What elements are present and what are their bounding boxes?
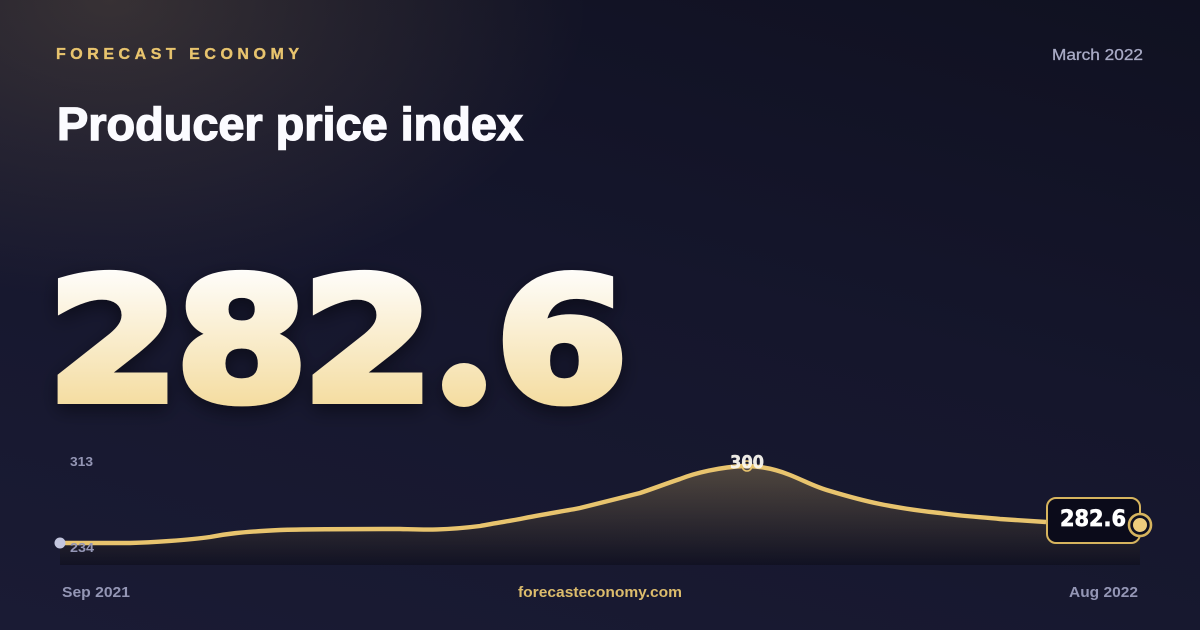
peak value: 300: [730, 452, 764, 473]
headline value: 8: [176, 242, 308, 441]
headline value: 2: [47, 242, 180, 441]
start date: Sep 2021: [62, 585, 130, 601]
area fill: [60, 466, 1140, 565]
start point: [54, 538, 66, 548]
end marker: [1129, 514, 1151, 536]
end callout: 282.6: [1060, 507, 1126, 532]
axis min label: 234: [70, 540, 95, 555]
headline value: 2: [302, 242, 434, 441]
website: forecasteconomy.com: [518, 585, 682, 601]
brand label: FORECAST ECONOMY: [56, 46, 299, 63]
title: Producer price index: [57, 98, 523, 150]
chart: [54, 452, 1151, 565]
axis max label: 313: [70, 454, 93, 469]
trend line: [60, 466, 1046, 543]
headline value: .: [451, 336, 477, 406]
date label: March 2022: [1052, 47, 1143, 64]
end date: Aug 2022: [1069, 585, 1138, 601]
headline value: 6: [495, 242, 628, 441]
headline value: [47, 242, 628, 441]
peak marker: [742, 461, 752, 471]
end callout: [1047, 498, 1140, 543]
